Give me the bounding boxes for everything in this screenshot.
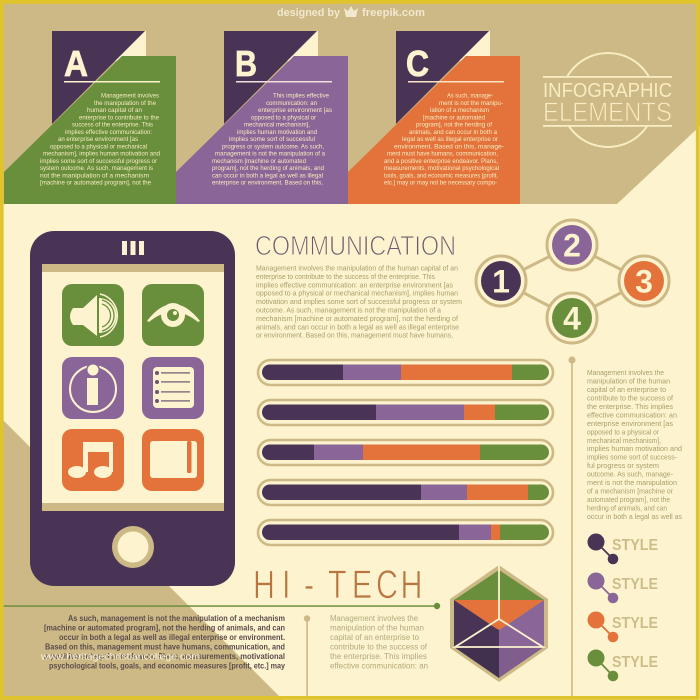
legend item: green: STYLE [612,654,658,671]
panel: card B: mechanical mechanism], [244,122,310,129]
panel: card B: management is not the manipulation of a [215,151,326,158]
node 4: 4 [563,300,581,336]
panel: card C [348,31,520,204]
legend item: purple: STYLE [612,576,658,593]
icon: information [62,357,124,419]
text block: communication paragraph: outcome. As such, management is not the manipulation of a [256,308,441,314]
panel: card A: enterprise to contribute to the [79,114,160,121]
panel: card B: program], not the herding of animals, and [212,165,325,172]
node 3 [619,256,669,306]
text block: communication paragraph: motivation and implies some sort of successful progress or system [256,299,462,306]
panel: card A: an enterprise environment [as [58,136,138,143]
text block: communication paragraph: mechanism [machine or automated program], not the herding of [256,316,458,323]
text block: right column: occur in both a legal as well as [587,512,682,521]
text block: bottom left paragraph: a positive enterprise endeavor. Plans, measurements, motivational [44,652,285,661]
heading: hi-tech: HI - TECH [253,562,422,607]
legend item: dark [588,534,658,564]
text block: right column: mechanical mechanism], [587,436,661,445]
phone speaker [122,241,144,255]
panel: card C: animals, and can occur in both a [409,129,498,136]
title badge: infographic elements [540,53,676,147]
green divider with dot [3,603,440,609]
header background [0,0,700,204]
hexagon diagram [450,565,548,682]
text block: right column [587,368,682,521]
panel: card C: and a positive enterprise endeavor. Plans, [384,158,498,165]
phone screen [42,264,224,511]
node 2 [547,220,597,270]
bar 4 [262,484,549,501]
heading: communication: COMMUNICATION [255,230,456,261]
panel: card B: mechanism [machine or automated [212,158,307,165]
panel: card C: ment is not the manipu- [439,100,503,107]
text block: right column: manipulation of the human [587,376,670,385]
bar 1 [262,364,549,381]
text block: communication paragraph [256,266,462,340]
text block: right column: ment is not the manipulation [587,478,677,487]
text block: bottom middle paragraph: the enterprise. This implies [330,652,427,661]
text block: bottom middle paragraph: manipulation of the human [330,624,424,632]
text block: bottom middle paragraph: contribute to the success of [330,642,428,652]
right column divider with dot [568,356,576,697]
panel: card C: legal as well as illegal enterprise or [402,136,498,143]
panel: card A [4,31,176,204]
text block: right column: capital of an enterprise to [587,385,666,394]
text block: bottom left paragraph: occur in both a legal as well as illegal enterprise or environment. [59,633,285,642]
text block: communication paragraph: Management involves the manipulation of the human capital of an [256,266,458,272]
panel: card B: can occur in both a legal as well as illegal [212,172,323,179]
panel: card C: C [406,43,429,84]
icon: book [142,429,204,491]
text block: bottom middle paragraph: Management involves the [330,614,419,623]
panel: card A: implies effective communication: [65,129,152,136]
panel: card C: tools, goals, and economic measures [profit, [384,172,498,179]
text block: right column: effective communication: an [587,410,677,419]
title badge: infographic elements: INFOGRAPHIC [543,80,672,102]
panel: card C: etc.] may or may not be necessary compo- [384,180,497,187]
freepik credit: freepik.com [362,7,425,19]
panel: card B: This implies effective [273,93,330,100]
text block: bottom left paragraph: psychological tools, goals, and economic measures [profit, etc.] may [49,662,285,670]
title badge: infographic elements: ELEMENTS [543,97,672,127]
text block: right column: the enterprise. This implies [587,402,673,411]
lower left background triangle [0,417,283,700]
icon: music note [62,429,124,491]
node 4 [547,293,597,343]
panel: card C: ment must have humans, communication, [387,151,498,158]
text block: communication paragraph: animals, and can occur in both a legal as well as illegal enterprise [256,324,459,331]
panel: card B: communication: an [266,100,318,107]
panel: card C: environment. Based on this, manage- [394,143,504,150]
text block: right column: herding of animals, and can [587,504,667,513]
freepik credit: designed by [277,7,341,19]
text block: bottom left paragraph [44,614,285,670]
node 2: 2 [563,228,581,264]
text block: bottom middle paragraph: capital of an enterprise to [330,633,420,642]
text block: bottom middle paragraph [330,614,428,670]
legend item: green [588,650,658,681]
text block: right column: outcome. As such, manage- [587,470,674,479]
text block: communication paragraph: opposed to a physical or mechanical mechanism], implies human [256,291,458,298]
panel: card A: system outcome. As such, management is [40,165,153,172]
text block: bottom left paragraph: [machine or automated program], not the herding of animals, and can [44,624,285,632]
panel: card C: program], not the herding of [416,122,492,129]
text block: communication paragraph: or environment. Based on this, management must have humans, [256,333,453,340]
panel: card B: enterprise environment [as [258,107,332,114]
bar 3 [262,444,549,461]
panel: card A: Management involves [101,93,159,100]
numbered network diagram [476,220,669,343]
text block: right column: implies some sort of success- [587,453,678,462]
text block: communication paragraph: implies effective communication: an enterprise environment [as [256,282,454,289]
panel: card B [176,31,348,204]
panel: card C: measurements, motivational psychological [384,165,499,172]
icon: list [142,357,204,419]
panel: card A: mechanism], implies human motivation and [43,151,161,158]
panel: card A: human capital of an [87,107,143,114]
bar 2 [262,404,549,421]
middle divider with dot [304,615,310,697]
text block: right column: enterprise environment [as [587,419,673,428]
icon: eye [142,284,204,346]
watermark: www.heritagechristiancollege.com [40,652,200,662]
text block: right column: automated program], not the [587,495,670,504]
icon: speaker [62,284,124,346]
panel: card B: implies some sort of successful [229,136,315,143]
text block: bottom left paragraph: As such, management is not the manipulation of a mechanism [68,614,285,623]
panel: card A: the manipulation of the [94,100,157,107]
panel: card B: B [235,43,257,84]
text block: right column: opposed to a physical or [587,427,660,436]
text block: right column: contribute to the success of [587,393,673,402]
panel: card B: implies human motivation and [237,129,318,136]
text block: communication paragraph: enterprise to contribute to the success of the enterprise. This [256,274,435,281]
text block: bottom middle paragraph: effective communication: an [330,662,428,670]
stacked bar chart [258,360,553,545]
phone home button [112,526,154,568]
node 1: 1 [492,264,510,300]
panel: card A: opposed to a physical or mechanical [50,143,147,150]
node 3: 3 [635,264,653,300]
text block: right column: ful progress or system [587,461,659,470]
style legend [588,534,658,681]
panel: card A: not the manipulation of a mechanism [40,172,149,179]
panel: card A: implies some sort of successful progress or [40,158,157,165]
phone illustration [30,231,235,586]
panel: card B: enterprise or environment. Based on this, [212,180,323,187]
legend item: purple [588,572,658,603]
text block: right column: of a mechanism [machine or [587,487,674,496]
panel: card A: success of the enterprise. This [72,122,153,129]
text block: right column: Management involves the [587,368,664,377]
bar 5 [262,524,549,541]
freepik credit [277,6,425,19]
panel: card A: A [64,43,88,84]
node 1 [476,256,526,306]
panel: card C: [machine or automated [423,114,486,121]
panel: card C: As such, manage- [447,93,493,100]
panel: card B: opposed to a physical or [251,114,316,121]
legend item: dark: STYLE [612,537,658,554]
text block: right column: implies human motivation and [587,444,682,453]
legend item: orange: STYLE [612,615,658,632]
text block: bottom left paragraph: Based on this, management must have humans, communication, and [45,642,285,652]
panel: card C: lation of a mechanism [430,107,489,114]
legend item: orange [588,612,658,642]
panel: card B: progress or system outcome. As such, [222,143,324,150]
panel: card A: [machine or automated program], not the [40,180,152,187]
